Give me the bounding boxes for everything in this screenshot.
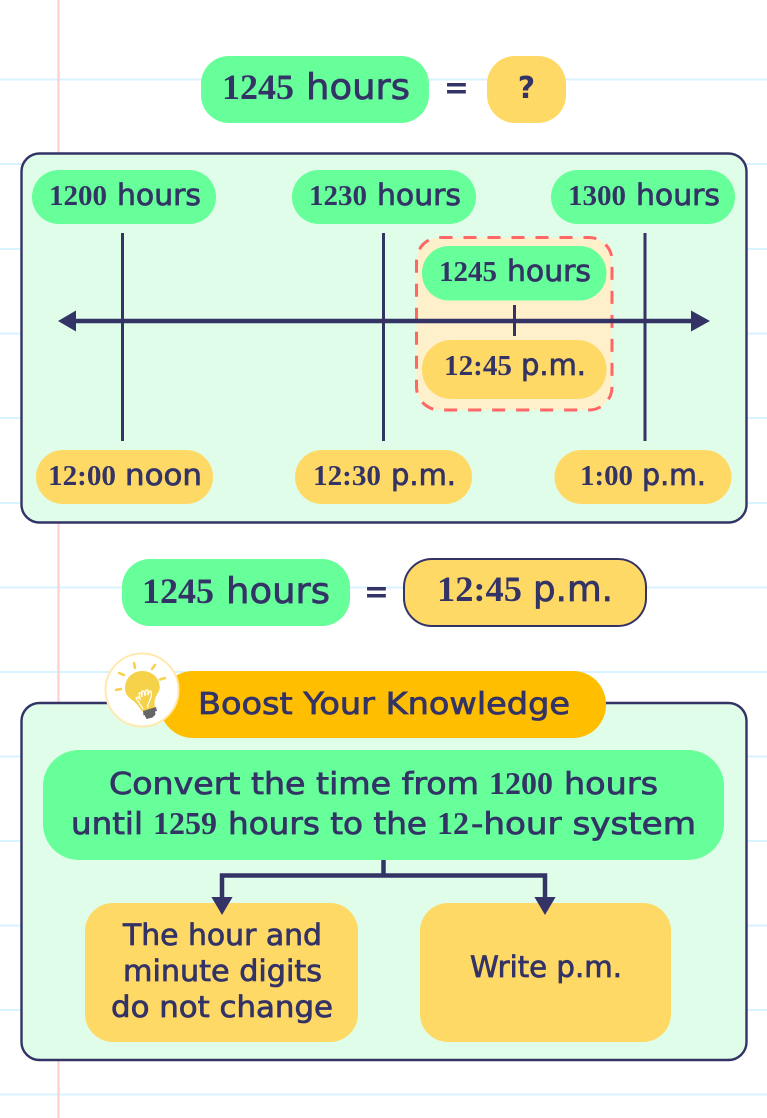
pill: 1245 hours on line <box>422 246 606 300</box>
equals sign: = <box>444 71 469 106</box>
banner: convert the time: 1259 <box>153 805 217 841</box>
banner: convert the time: Convert the time from <box>109 767 479 802</box>
pill: 1245 hours <box>201 56 429 123</box>
pill: 1230 hours: hours <box>377 178 461 212</box>
pill: 12:45 p.m. on line <box>422 340 606 399</box>
pill: question mark: ? <box>518 71 535 106</box>
pill: 1:00 p.m.: 1:00 <box>580 460 633 492</box>
panel: number line <box>22 154 746 522</box>
pill: 1245 hours: hours <box>306 67 410 108</box>
box: write p.m. <box>420 897 671 1042</box>
banner: convert the time: hours to the <box>228 807 427 842</box>
pill: 12:45 p.m. answer: p.m. <box>533 569 613 610</box>
pill: 12:45 p.m. on line: 12:45 <box>444 350 512 382</box>
arrow connector <box>212 860 556 915</box>
pill: 1245 hours: 1245 <box>142 571 214 611</box>
pill: 1300 hours: 1300 <box>568 180 626 212</box>
box: digits do not change: The hour and <box>122 918 322 952</box>
box: write p.m.: Write p.m. <box>470 950 622 984</box>
highlight: 1245 region <box>416 238 612 410</box>
equation: 1245 hours equals ? <box>201 56 566 123</box>
pill: 12:00 noon <box>36 450 213 504</box>
box: digits do not change <box>85 897 358 1042</box>
pill: 1245 hours: 1245 <box>222 67 294 107</box>
equals sign: = <box>364 575 389 610</box>
pill: 1230 hours <box>292 170 476 224</box>
banner: convert the time: hours <box>564 767 658 802</box>
pill: 1200 hours: hours <box>117 178 201 212</box>
pill: 12:00 noon: noon <box>125 458 202 492</box>
pill: 1200 hours <box>32 170 216 224</box>
pill: 1245 hours: hours <box>226 571 330 612</box>
pill: 1:00 p.m.: p.m. <box>642 458 706 492</box>
pill: 12:45 p.m. answer <box>404 559 646 626</box>
pill: 1230 hours: 1230 <box>309 180 367 212</box>
tick marks <box>122 233 645 441</box>
banner: convert the time: until <box>71 807 143 842</box>
box: digits do not change: do not change <box>111 990 333 1024</box>
banner: convert the time: -hour system <box>471 807 696 842</box>
pill: 1200 hours: 1200 <box>49 180 107 212</box>
pill: 12:45 p.m. answer: 12:45 <box>437 569 522 609</box>
pill: 12:30 p.m.: p.m. <box>391 458 456 492</box>
pill: question mark <box>487 56 566 123</box>
heading: Boost Your Knowledge: Boost Your Knowledge <box>198 687 570 722</box>
pill: 1245 hours <box>122 559 350 626</box>
pill: 1300 hours <box>551 170 735 224</box>
pill: 1300 hours: hours <box>636 178 720 212</box>
number line arrow <box>58 310 710 332</box>
pill: 1:00 p.m. <box>554 450 732 504</box>
pill: 12:30 p.m.: 12:30 <box>313 460 381 492</box>
box: digits do not change: minute digits <box>123 954 322 988</box>
equation: 1245 hours equals 12:45 p.m. <box>122 559 646 626</box>
pill: 12:00 noon: 12:00 <box>48 460 116 492</box>
pill: 12:30 p.m. <box>295 450 472 504</box>
banner: convert the time <box>43 750 724 860</box>
pill: 1245 hours on line: hours <box>507 254 591 288</box>
pill: 12:45 p.m. on line: p.m. <box>521 348 586 382</box>
pill: 1245 hours on line: 1245 <box>439 256 497 288</box>
icon: light bulb <box>106 654 178 726</box>
heading: Boost Your Knowledge <box>160 671 606 738</box>
panel: Boost Your Knowledge <box>22 654 746 1060</box>
banner: convert the time: 1200 <box>489 765 553 801</box>
banner: convert the time: 12 <box>437 805 469 841</box>
